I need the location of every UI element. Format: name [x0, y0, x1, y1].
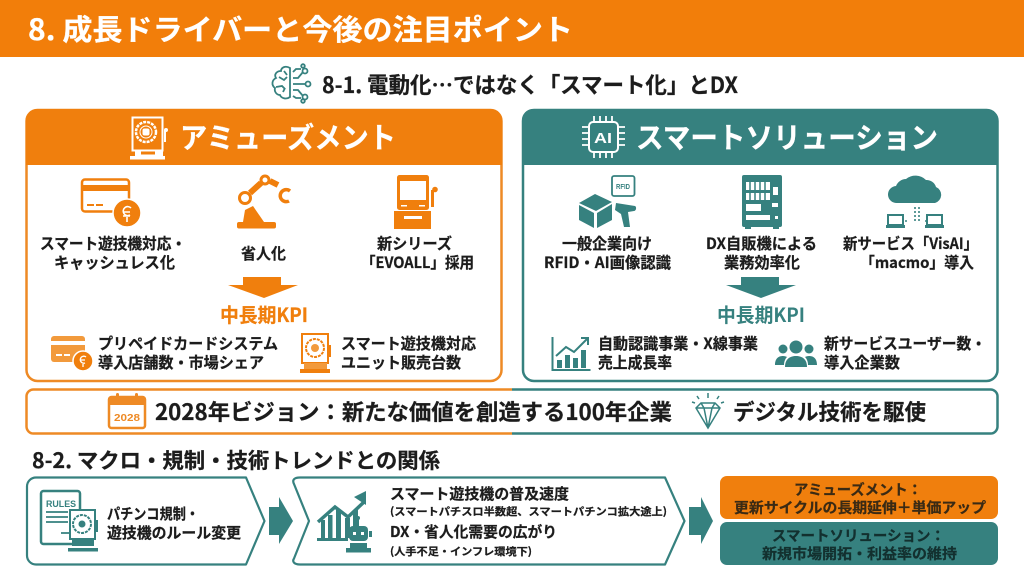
icon: 2028 calendar: 2028 — [114, 412, 140, 424]
item: labor saving — [237, 176, 290, 264]
item: EVOALL: 「EVOALL」採用 — [361, 251, 474, 273]
icon: diamond — [692, 393, 724, 428]
KPI: smart machine units: ユニット販売台数 — [341, 351, 461, 373]
KPI: auto recognition growth: 自動認識事業・X線事業 — [598, 332, 758, 354]
KPI heading: smart solutions: 中長期KPI — [717, 299, 805, 328]
panel title: amusement: アミューズメント — [180, 115, 396, 157]
item: labor saving: 省人化 — [241, 242, 286, 264]
KPI: prepaid card — [51, 332, 278, 373]
item: RFID — [544, 176, 671, 273]
vision sub text: デジタル技術を駆使 — [733, 395, 926, 427]
icon: vending machine — [742, 175, 782, 229]
arrow: right 1 — [269, 497, 293, 544]
panel header: amusement — [26, 109, 502, 165]
icon: rules document with machine — [41, 491, 98, 552]
icon: rules document with machine: RULES — [46, 499, 76, 510]
item: EVOALL: 新シリーズ — [377, 232, 452, 254]
flow box: regulation: パチンコ規制・ — [107, 503, 199, 524]
item: DX vending — [706, 175, 817, 273]
section heading 8-2: 8-2. マクロ・規制・技術トレンドとの関係 — [32, 445, 440, 475]
vision bar — [26, 390, 998, 434]
item: VisAI macmo — [843, 176, 978, 273]
flow box: trends — [293, 478, 684, 564]
header band — [0, 0, 1024, 57]
item: EVOALL — [361, 175, 474, 273]
KPI: new service users: 新サービスユーザー数・ — [824, 332, 986, 354]
title: 8. 成長ドライバーと今後の注目ポイント — [28, 7, 573, 49]
icon: 2028 calendar — [109, 393, 145, 428]
flow box: trends: (人手不足・インフレ環境下) — [390, 544, 532, 559]
arrow: down teal — [726, 277, 796, 298]
icon: pachinko machine white — [130, 118, 168, 160]
arrow: right 2 — [689, 497, 713, 544]
icon: cloud and laptops — [886, 176, 944, 228]
item: smart cashless — [40, 180, 186, 273]
KPI: auto recognition growth — [552, 332, 758, 373]
outcome: amusement — [720, 476, 998, 519]
outcome: smart solutions: スマートソリューション： — [772, 525, 945, 546]
section heading 8-1: 8-1. 電動化…ではなく「スマート化」とDX — [322, 68, 738, 100]
flow box: trends: スマート遊技機の普及速度 — [390, 483, 569, 504]
KPI: new service users: 導入企業数 — [824, 351, 900, 373]
icon: people group — [775, 340, 817, 367]
KPI: new service users — [775, 332, 986, 373]
icon: AI brain — [272, 64, 310, 103]
item: VisAI macmo: 新サービス「VisAI」 — [843, 232, 978, 254]
item: smart cashless: スマート遊技機対応・ — [40, 232, 186, 254]
icon: pachinko machine orange — [300, 334, 331, 373]
outcome: smart solutions: 新規市場開拓・利益率の維持 — [762, 543, 958, 564]
outcome: amusement: 更新サイクルの長期延伸＋単価アップ — [734, 497, 987, 518]
panel: smart solutions — [522, 109, 998, 381]
icon: growth chart with robot — [317, 491, 372, 552]
item: VisAI macmo: 「macmo」導入 — [860, 251, 974, 273]
KPI: smart machine units: スマート遊技機対応 — [341, 332, 476, 354]
KPI: prepaid card: 導入店舗数・市場シェア — [98, 351, 264, 373]
icon: growth chart — [552, 337, 590, 370]
flow box: trends: DX・省人化需要の広がり — [390, 521, 557, 542]
icon: robot arm — [237, 176, 290, 228]
vision text: 2028年ビジョン：新たな価値を創造する100年企業 — [155, 395, 672, 427]
flow box: regulation: 遊技機のルール変更 — [107, 522, 241, 543]
item: RFID: 一般企業向け — [562, 232, 652, 254]
flow box: trends: (スマートパチスロ半数超、スマートパチンコ拡大途上) — [390, 504, 667, 519]
outcome: smart solutions — [720, 522, 998, 565]
panel title: smart solutions: スマートソリューション — [636, 115, 938, 157]
panel: amusement — [26, 109, 502, 381]
KPI: auto recognition growth: 売上成長率 — [598, 351, 672, 373]
KPI: prepaid card: プリペイドカードシステム — [98, 332, 278, 354]
KPI: smart machine units — [300, 332, 476, 373]
item: DX vending: DX自販機による — [706, 232, 817, 254]
icon: AI chip — [582, 116, 625, 158]
arrow: down orange — [228, 277, 298, 298]
item: DX vending: 業務効率化 — [724, 251, 800, 273]
panel header: smart solutions — [522, 109, 998, 165]
icon: prepaid card — [51, 336, 93, 371]
KPI heading: amusement: 中長期KPI — [220, 299, 308, 328]
icon: card and coin — [82, 180, 141, 227]
item: RFID: RFID・AI画像認識 — [544, 251, 671, 273]
icon: RFID box and scanner: RFID — [616, 184, 630, 191]
flow box: regulation — [27, 478, 264, 564]
outcome: amusement: アミューズメント： — [794, 479, 922, 500]
icon: slot machine — [394, 175, 438, 229]
item: smart cashless: キャッシュレス化 — [54, 251, 175, 273]
icon: AI chip: AI — [594, 130, 612, 147]
